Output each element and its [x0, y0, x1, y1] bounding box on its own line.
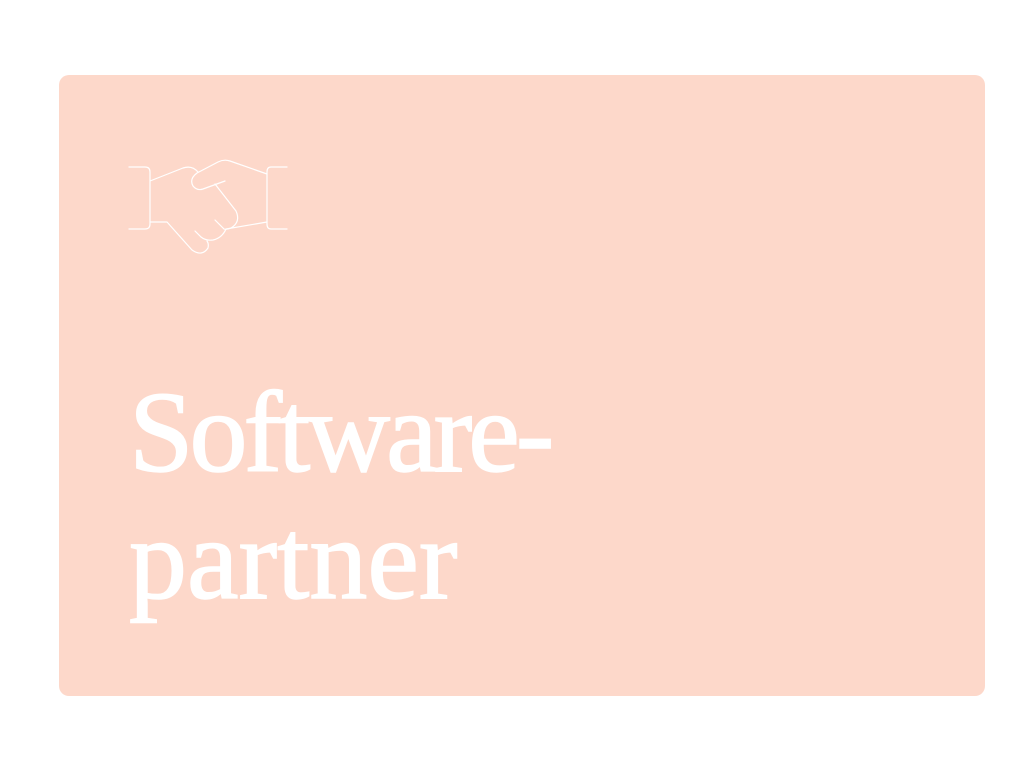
title: Software- — [129, 369, 550, 497]
panel: card — [59, 75, 985, 696]
title: partner — [129, 496, 457, 624]
title — [129, 369, 551, 624]
